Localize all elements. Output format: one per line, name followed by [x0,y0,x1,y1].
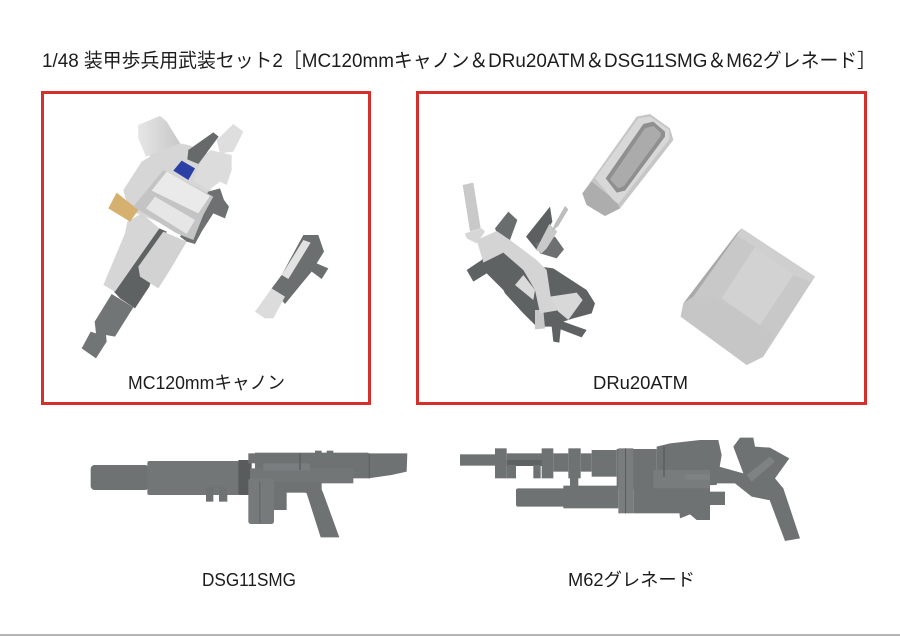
panel: MC120mm cannon frame [42,92,370,404]
panel: DRu20ATM frame [418,92,866,404]
label: M62 grenade launcher: M62グレネード [568,570,695,590]
title: 1/48 装甲歩兵用武装セット2［MC120mmキャノン＆DRu20ATM＆DSG11SMG＆M62グレネード］ [42,50,876,72]
label: MC120mm cannon: MC120mmキャノン [128,373,285,393]
label: DRu20ATM: DRu20ATM [593,373,688,393]
DRu20ATM launcher [463,183,595,343]
DSG11SMG gun [91,451,407,537]
M62 grenade launcher [460,438,800,541]
label: DSG11SMG: DSG11SMG [202,570,296,590]
MC120mm cannon main part [82,116,243,358]
bottom edge rule [0,634,900,636]
DRu20ATM box [681,228,815,365]
DRu20ATM magazine [582,114,673,216]
MC120mm cannon small part [255,235,328,318]
